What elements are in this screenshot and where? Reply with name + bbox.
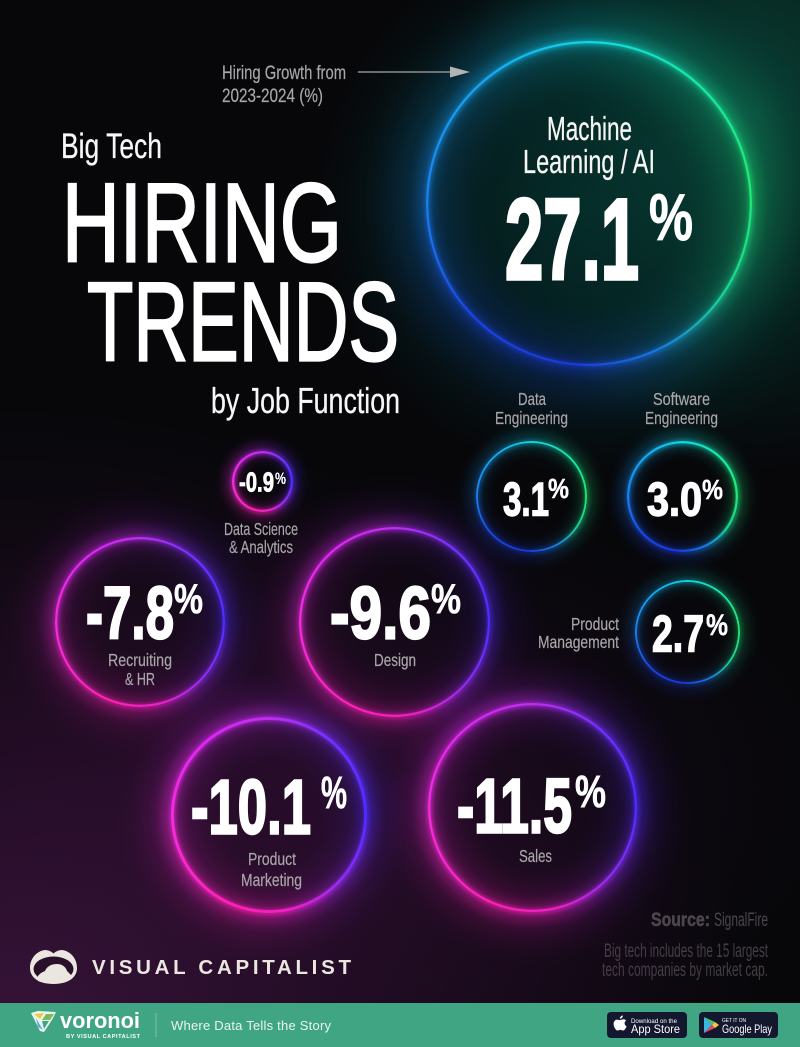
label: Data Engineering: Engineering	[495, 408, 568, 428]
panel: product marketing circle	[136, 682, 402, 948]
value: -0.9%: %	[275, 469, 286, 488]
annotation: hiring growth legend: 2023-2024 (%)	[222, 86, 323, 107]
label: Sales: Sales	[519, 846, 552, 866]
annotation: hiring growth legend: Hiring Growth from	[222, 63, 346, 84]
label: Software Engineering	[645, 389, 718, 428]
label: Machine Learning / AI: Learning / AI	[523, 143, 655, 180]
wordmark: voronoi: BY VISUAL CAPITALIST	[66, 1034, 141, 1040]
source note	[651, 910, 768, 931]
label: Product Marketing: Product	[248, 849, 296, 869]
value: 3.1%: 3.1	[503, 472, 549, 526]
label: Data Science & Analytics: Data Science	[224, 519, 298, 539]
value: 3.0%: %	[702, 474, 723, 505]
label: Design: Design	[374, 650, 416, 670]
label: Machine Learning / AI: Machine	[547, 110, 632, 147]
source note: SignalFire	[714, 910, 768, 931]
label: Data Engineering	[495, 389, 568, 428]
label: Product Management: Product	[571, 614, 619, 634]
label: Data Engineering: Data	[518, 389, 546, 409]
heading: by Job Function: by Job Function	[211, 380, 400, 421]
panel: software engineering circle	[612, 389, 753, 566]
icon: voronoi	[31, 1011, 56, 1032]
wordmark: voronoi: voronoi	[60, 1008, 140, 1033]
label: Software Engineering: Engineering	[645, 408, 718, 428]
panel: sales circle	[393, 667, 674, 948]
button: google play	[699, 1012, 778, 1038]
value: -9.6%: %	[431, 575, 461, 622]
panel: recruiting and HR circle	[24, 505, 257, 738]
label: Recruiting & HR	[108, 650, 172, 689]
value: -10.1%: %	[321, 767, 347, 818]
value: 3.1%: %	[548, 473, 569, 504]
panel: data engineering circle	[462, 389, 601, 566]
value: -7.8%: %	[174, 575, 203, 622]
value: -11.5%: %	[575, 766, 606, 817]
tagline: Where Data Tells the Story	[171, 1018, 332, 1033]
footer bar	[0, 1003, 800, 1047]
label: Data Science & Analytics	[224, 519, 298, 557]
value: -0.9%: -0.9	[239, 466, 274, 498]
label: Product Management	[538, 614, 619, 652]
label: Recruiting & HR: Recruiting	[108, 650, 172, 670]
value: -9.6%: -9.6	[330, 572, 431, 654]
button: app store: App Store	[631, 1022, 680, 1036]
value: -10.1%: -10.1	[191, 764, 311, 850]
label: Product Marketing	[241, 849, 302, 890]
source note: Source:	[651, 910, 710, 931]
label: Product Marketing: Marketing	[241, 870, 302, 890]
button: google play: GET IT ON	[722, 1018, 746, 1024]
panel: machine learning circle	[376, 0, 799, 414]
label: Data Science & Analytics: & Analytics	[229, 537, 293, 557]
footnote	[602, 941, 768, 981]
panel: product management circle	[538, 566, 754, 697]
value: 2.7%: 2.7	[652, 606, 704, 664]
button: app store: Download on the	[631, 1019, 678, 1025]
wordmark: visual capitalist: VISUAL CAPITALIST	[92, 956, 351, 979]
label: Machine Learning / AI	[523, 110, 655, 180]
title block	[61, 127, 400, 421]
value: -11.5%: -11.5	[457, 764, 572, 850]
arrow	[358, 66, 470, 78]
value: 3.0%: 3.0	[647, 472, 702, 526]
label: Product Management: Management	[538, 632, 619, 652]
value: 2.7%: %	[706, 609, 728, 642]
label: Software Engineering: Software	[653, 389, 710, 409]
label: Recruiting & HR: & HR	[125, 669, 155, 689]
value: -7.8%: -7.8	[86, 572, 174, 654]
button: google play: Google Play	[722, 1022, 772, 1036]
panel: data science and analytics circle	[219, 438, 306, 557]
value: 27.1%: 27.1	[505, 176, 639, 304]
annotation: hiring growth legend	[222, 63, 346, 107]
heading: Big Tech: Big Tech	[61, 127, 162, 166]
button: app store	[607, 1012, 687, 1038]
panel: design circle	[268, 494, 523, 748]
heading: TRENDS: TRENDS	[87, 260, 399, 384]
heading: HIRING: HIRING	[62, 160, 342, 286]
icon: visual capitalist logo	[30, 950, 77, 984]
value: 27.1%: %	[649, 180, 693, 254]
